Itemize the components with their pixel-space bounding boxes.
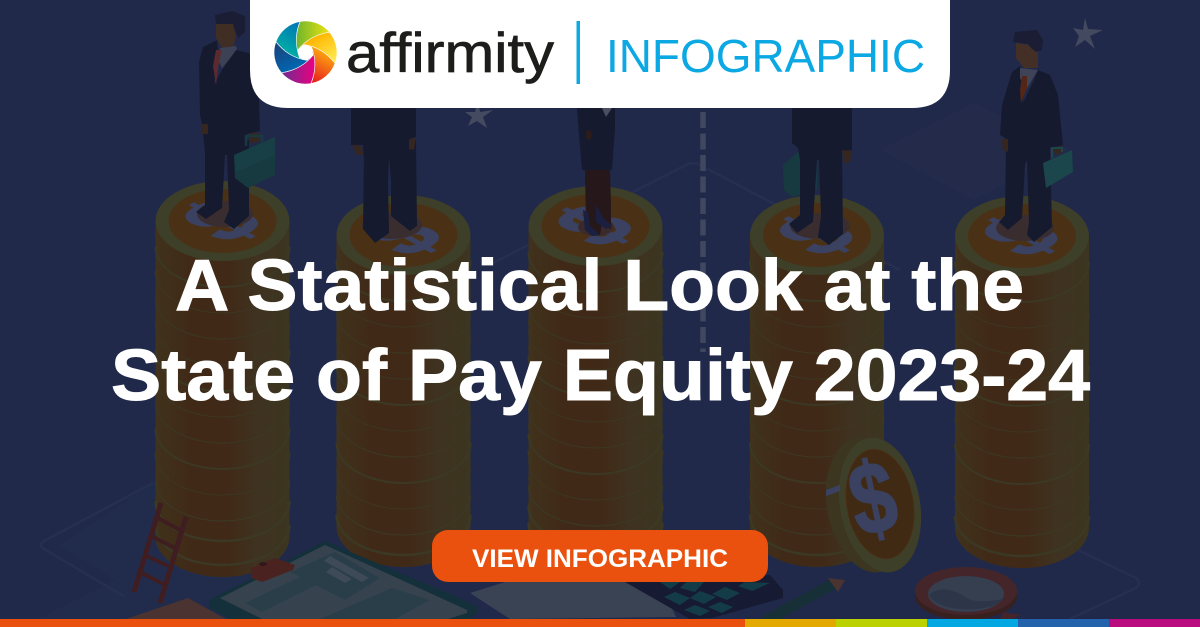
logo icon: aperture — [266, 16, 345, 89]
isometric ground shapes — [38, 103, 1139, 619]
title — [111, 246, 1090, 416]
coin stack 2 — [336, 195, 470, 567]
coin stack 5 — [955, 196, 1089, 568]
colour bar — [0, 619, 1200, 627]
person 1 with briefcase — [196, 11, 275, 229]
person 3: woman in skirt — [577, 108, 615, 236]
pencil — [765, 578, 845, 621]
clipboard — [209, 541, 478, 619]
view infographic button — [432, 530, 768, 582]
calculator — [625, 575, 783, 619]
header panel — [250, 0, 950, 108]
ladder — [134, 503, 186, 603]
coin stack 4 — [750, 195, 884, 567]
leaning dollar coin — [816, 431, 931, 579]
person 2 — [351, 108, 422, 243]
dashed vertical line — [700, 112, 706, 352]
coin stack 3 — [528, 186, 662, 575]
view infographic button: VIEW INFOGRAPHIC — [472, 545, 728, 573]
title: A Statistical Look at the — [175, 246, 1024, 326]
title: State of Pay Equity 2023-24 — [111, 336, 1090, 416]
person 5 with briefcase — [996, 30, 1073, 242]
star: right — [1073, 18, 1103, 49]
star: left — [465, 100, 493, 128]
leaning dollar coin: $ — [840, 439, 906, 558]
magnifying glass — [915, 567, 1021, 620]
paper sheets — [470, 540, 676, 619]
logo wordmark: affirmity — [346, 21, 554, 84]
infographic label: INFOGRAPHIC — [606, 30, 925, 82]
person 4 with briefcase — [783, 108, 852, 245]
orange paper — [126, 598, 226, 619]
divider — [576, 21, 580, 84]
coin stack 1 — [156, 181, 290, 577]
